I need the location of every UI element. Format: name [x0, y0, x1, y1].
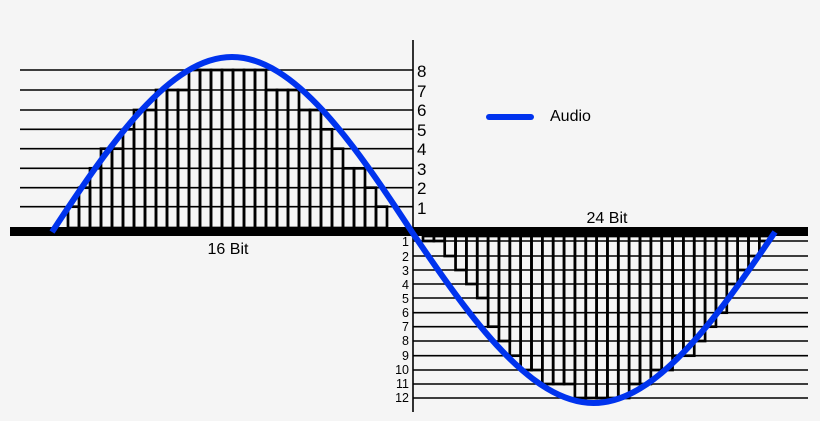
left level labels	[417, 62, 426, 218]
right level labels: 6	[402, 306, 409, 320]
left level labels: 4	[417, 140, 426, 159]
label: 16 Bit: 16 Bit	[208, 241, 249, 258]
right level labels: 5	[402, 292, 409, 306]
right level labels: 1	[402, 235, 409, 249]
right level labels: 7	[402, 320, 409, 334]
right level labels: 4	[402, 278, 409, 292]
16 bit staircase bars	[68, 70, 387, 228]
label: 24 Bit: 24 Bit	[587, 210, 628, 227]
right level labels: 8	[402, 334, 409, 348]
right level labels: 11	[396, 377, 409, 391]
24 bit staircase bars	[423, 236, 770, 398]
right level labels: 9	[402, 349, 409, 363]
right level labels: 2	[402, 250, 409, 264]
legend: Audio	[550, 108, 591, 125]
right level labels: 10	[395, 363, 409, 377]
audio sine wave	[52, 57, 775, 403]
left level labels: 6	[417, 101, 426, 120]
right level labels: 12	[395, 391, 409, 405]
left level labels: 1	[417, 199, 426, 218]
axis: thick baseline	[10, 227, 808, 236]
left level labels: 2	[417, 179, 426, 198]
right level labels: 3	[402, 264, 409, 278]
left level labels: 5	[417, 121, 426, 140]
legend	[489, 108, 591, 125]
left level labels: 3	[417, 160, 426, 179]
right level labels	[395, 235, 409, 405]
left level labels: 7	[417, 82, 426, 101]
left level labels: 8	[417, 62, 426, 81]
